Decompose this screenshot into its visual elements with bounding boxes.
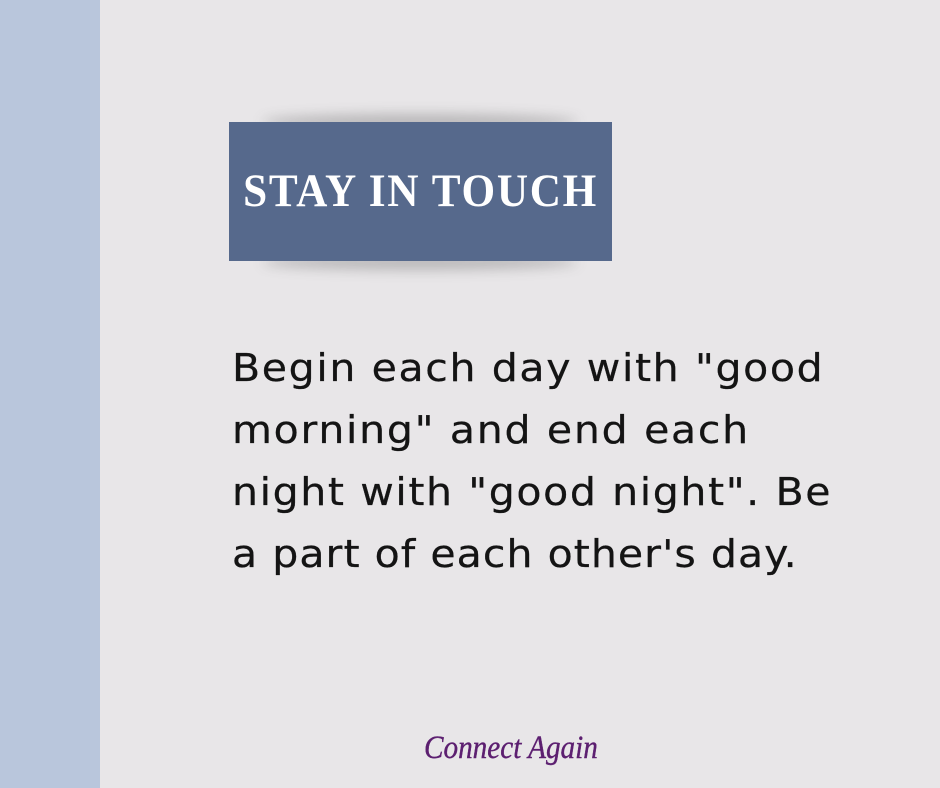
body text: a part of each other's day. [232,532,798,576]
body text: night with "good night". Be [232,470,832,514]
heading: STAY IN TOUCH [243,165,598,217]
heading banner [229,122,612,261]
body text: Begin each day with "good [232,346,824,390]
side band [0,0,100,788]
body text: morning" and end each [232,408,750,452]
heading banner shadow top [262,114,578,130]
brand signature: Connect Again [424,730,598,766]
heading banner shadow bottom [262,254,578,270]
body text [232,346,832,576]
